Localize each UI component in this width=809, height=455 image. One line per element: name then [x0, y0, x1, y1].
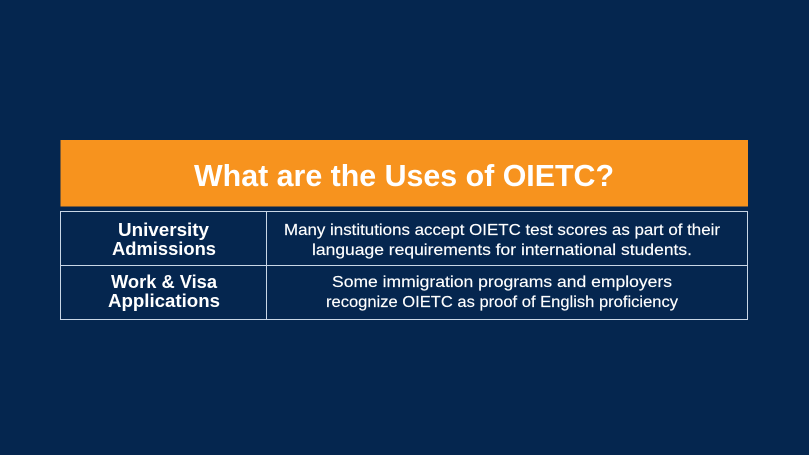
row label: University Admissions: Admissions: [112, 238, 216, 259]
row label: University Admissions: University: [118, 219, 210, 240]
row label: University Admissions: [112, 219, 216, 259]
row description: work and visa applications: Some immigration programs and employers: [332, 274, 672, 291]
row description: university admissions: language requirements for international students.: [312, 242, 692, 259]
row description: university admissions: Many institutions accept OIETC test scores as part of their: [284, 222, 721, 239]
row label: Work and Visa Applications: Applications: [108, 290, 220, 311]
title banner: [60, 140, 748, 206]
title: What are the Uses of OIETC?: [194, 158, 614, 193]
table grid: [60, 212, 748, 320]
row description: work and visa applications: recognize OIETC as proof of English proficiency: [326, 294, 678, 311]
row description: university admissions: [284, 222, 721, 259]
row description: work and visa applications: [326, 274, 678, 311]
table: [60, 212, 748, 320]
row label: Work and Visa Applications: [108, 271, 220, 311]
row label: Work and Visa Applications: Work & Visa: [111, 271, 218, 292]
